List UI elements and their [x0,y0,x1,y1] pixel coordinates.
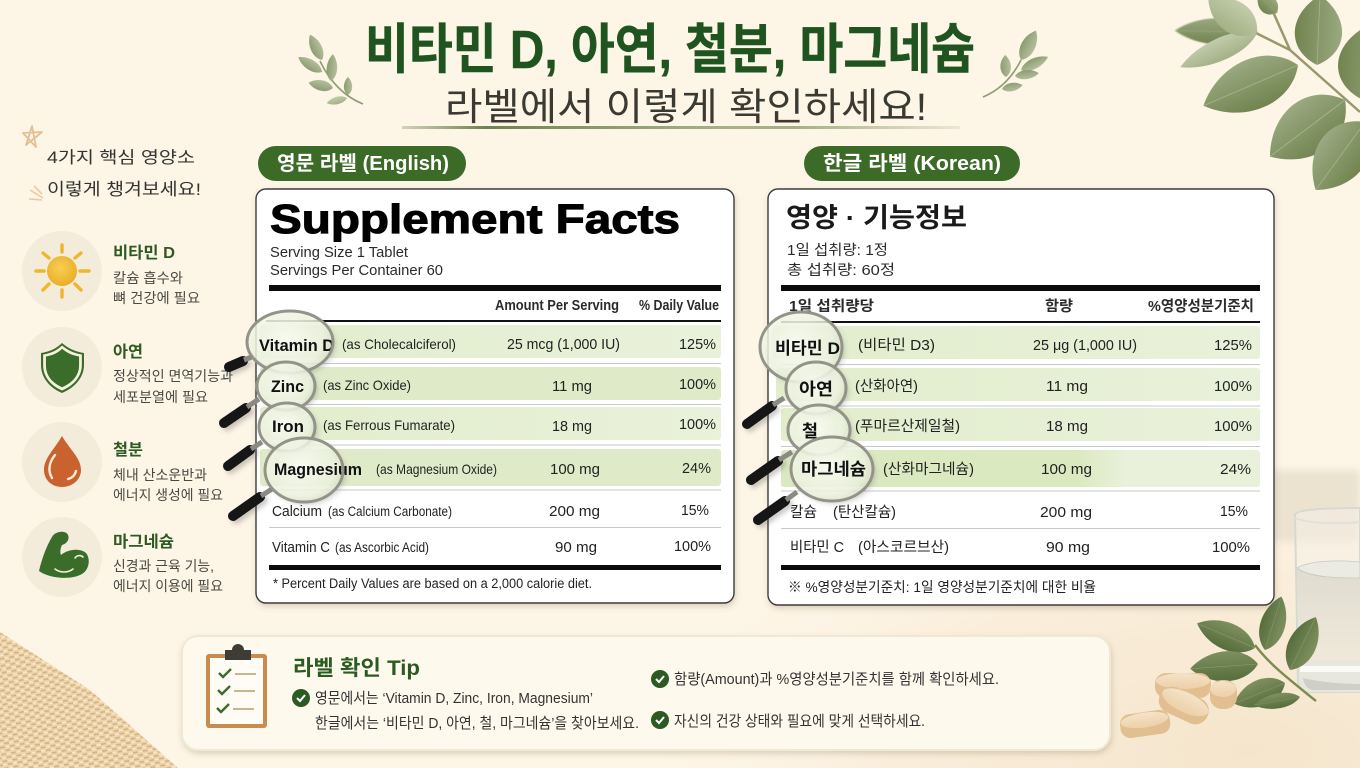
English label tag: 영문 라벨 (English) [277,152,449,175]
tip 2: 함량(Amount)과 %영양성분기준치를 함께 확인하세요. [674,671,999,688]
nutrient: zinc [22,327,233,407]
row: iron values [855,418,1252,435]
row: vitamin D values: 25 mcg (1,000 IU) [507,336,620,353]
description: 세포분열에 필요 [113,389,208,405]
row: magnesium values: 100 mg [1041,461,1092,478]
Korean label tag: 한글 라벨 (Korean) [823,152,1001,175]
icon: clipboard [206,644,267,728]
description: 신경과 근육 기능, [113,558,214,574]
row: iron values: 100% [1214,418,1252,435]
row: calcium: Calcium [272,504,322,520]
description: 칼슘 흡수와 [113,270,183,286]
tablet [1119,709,1172,739]
row: zinc values: 11 mg [1046,378,1088,395]
magnifier: Zinc: Zinc [271,377,304,396]
magnifier: 비타민 D [760,312,842,382]
row: calcium: 15% [681,502,709,519]
row: vitamin C: Vitamin C [272,540,330,556]
row: calcium: 15% [1220,503,1248,520]
right laurel [983,27,1050,97]
row: vitamin D values [858,337,1252,354]
panel: Korean nutrition label [768,189,1274,605]
daily serving: 1일 섭취량: 1정 [787,242,888,259]
icon: shield [22,327,102,407]
title: 비타민 D, 아연, 철분, 마그네슘 [365,20,975,80]
magnifier: Magnesium: Magnesium [274,460,362,479]
title underline [402,126,960,129]
left laurel [295,32,363,107]
magnifier: 아연: 아연 [799,380,833,399]
row: zinc values [323,376,716,395]
row: vitamin D values: 125% [679,336,716,353]
description: 정상적인 면역기능과 [113,368,233,384]
magnifier: 마그네슘: 마그네슘 [801,460,866,479]
highlighted rows [772,326,1260,487]
panel: English supplement facts [256,189,734,603]
icon: sun [22,231,102,311]
row: vitamin C: 100% [674,538,711,555]
row: calcium: (탄산칼슘) [833,504,896,521]
row: magnesium values: (as Magnesium Oxide) [376,461,497,477]
description: 에너지 생성에 필요 [113,487,223,503]
panel frame [256,189,734,603]
magnifier: 철 [751,405,850,480]
row: magnesium values: 24% [1220,461,1251,478]
icon: spark marks [29,186,43,200]
row: zinc values: 11 mg [552,378,592,395]
nutrient: vitamin D [22,231,200,311]
row: calcium: 200 mg [549,503,600,520]
row: vitamin C [272,538,711,556]
magnifier: Vitamin D [229,311,334,373]
row: zinc values: 100% [679,376,716,393]
burlap cloth [0,632,178,768]
icon: hand-drawn star [23,126,42,147]
row: zinc values: (as Zinc Oxide) [323,377,411,393]
column header: per day: 1일 섭취량당 [789,298,874,315]
row: vitamin C [790,539,1250,556]
highlighted rows [260,325,721,486]
row: vitamin D values: 125% [1214,337,1252,354]
description: 에너지 이용에 필요 [113,578,223,594]
sprig of leaves [1189,593,1328,716]
row: zinc values: 100% [1214,378,1252,395]
row: vitamin C: 90 mg [555,539,597,556]
column header: amount: Amount Per Serving [495,298,619,314]
round tablet [1210,680,1237,709]
panel: label tips [182,636,1110,750]
row: vitamin D values [342,336,716,353]
column header: percent: %영양성분기준치 [1148,298,1254,315]
row: calcium [790,503,1248,521]
magnifier: 비타민 D: 비타민 D [775,339,840,358]
side intro note [23,126,201,200]
name: 마그네슘 [113,533,174,551]
tip 1 line 2: 한글에서는 ‘비타민 D, 아연, 철, 마그네슘’을 찾아보세요. [315,715,639,732]
row: zinc values: (산화아연) [855,378,918,395]
row: magnesium values: 24% [682,460,711,477]
panel frame [182,636,1110,750]
name: 아연 [113,343,143,361]
servings per container: Servings Per Container 60 [270,263,443,279]
magnifier: 아연 [747,362,846,424]
row: vitamin C: (아스코르브산) [858,539,949,556]
row: magnesium values: 100 mg [550,461,600,478]
Korean label tag [804,146,1020,181]
total servings: 총 섭취량: 60정 [787,262,895,279]
row: zinc values [855,378,1252,395]
magnifier: Vitamin D: Vitamin D [259,336,334,355]
row: vitamin D values: (비타민 D3) [858,337,935,354]
blurred back wall band [1270,470,1360,542]
row: iron values: 100% [679,416,716,433]
magnifier: 철: 철 [802,422,818,441]
name: 비타민 D [113,244,175,262]
panel heading: Supplement Facts [270,196,680,242]
footnote: * Percent Daily Values are based on a 2,000 calorie diet. [273,576,592,591]
note line 2: 이렇게 챙겨보세요! [47,180,201,199]
note line 1: 4가지 핵심 영양소 [47,148,195,167]
magnifier: 마그네슘 [758,437,873,520]
row: calcium: (as Calcium Carbonate) [328,504,452,519]
tabletop [600,400,1360,768]
row: vitamin C: (as Ascorbic Acid) [335,540,429,555]
icon: check [651,670,669,688]
row: iron values: (as Ferrous Fumarate) [323,417,455,433]
English label tag [258,146,466,181]
row: magnesium values [376,460,711,478]
row: vitamin C: 비타민 C [790,539,844,556]
row: iron values [323,416,716,435]
top right leaves [1175,0,1360,205]
row: iron values: (푸마르산제일철) [855,418,960,435]
row: iron values: 18 mg [552,418,592,435]
row: vitamin C: 100% [1212,539,1250,556]
column header: daily value: % Daily Value [639,298,719,314]
row: magnesium values: (산화마그네슘) [883,461,974,478]
column header: amount: 함량 [1045,298,1073,315]
footnote: ※ %영양성분기준치: 1일 영양성분기준치에 대한 비율 [788,579,1096,595]
tablet [1155,673,1211,698]
row: vitamin D values: 25 μg (1,000 IU) [1033,337,1137,354]
magnifier: Iron [228,403,315,466]
icon: blood drop [22,422,102,502]
magnifier: Zinc [224,362,315,423]
name: 철분 [113,441,143,459]
panel frame [768,189,1274,605]
tablet [1155,682,1213,729]
nutrient: magnesium [22,517,223,597]
icon: flexed arm [22,517,102,597]
description: 뼈 건강에 필요 [113,290,200,306]
tip 1 line 1: 영문에서는 ‘Vitamin D, Zinc, Iron, Magnesium’ [315,690,593,707]
magnifier: Iron: Iron [272,417,304,436]
icon: check [651,711,669,729]
row: vitamin D values: (as Cholecalciferol) [342,336,456,352]
row: calcium: 칼슘 [790,504,817,521]
row: vitamin C: 90 mg [1046,539,1090,556]
row: iron values: 18 mg [1046,418,1088,435]
serving size: Serving Size 1 Tablet [270,245,408,261]
row: calcium: 200 mg [1040,504,1092,521]
row: calcium [272,502,709,520]
magnifier: Magnesium [233,438,362,516]
water glass [1295,508,1360,692]
panel heading: 영양 · 기능정보 [786,203,967,233]
subtitle: 라벨에서 이렇게 확인하세요! [445,87,927,129]
tip 3: 자신의 건강 상태와 필요에 맞게 선택하세요. [674,713,925,730]
supplement tablets [1119,673,1237,739]
nutrient: iron [22,422,223,503]
row: magnesium values [883,461,1251,478]
icon: check [292,689,310,707]
description: 체내 산소운반과 [113,467,207,483]
tip heading: 라벨 확인 Tip [293,657,420,680]
